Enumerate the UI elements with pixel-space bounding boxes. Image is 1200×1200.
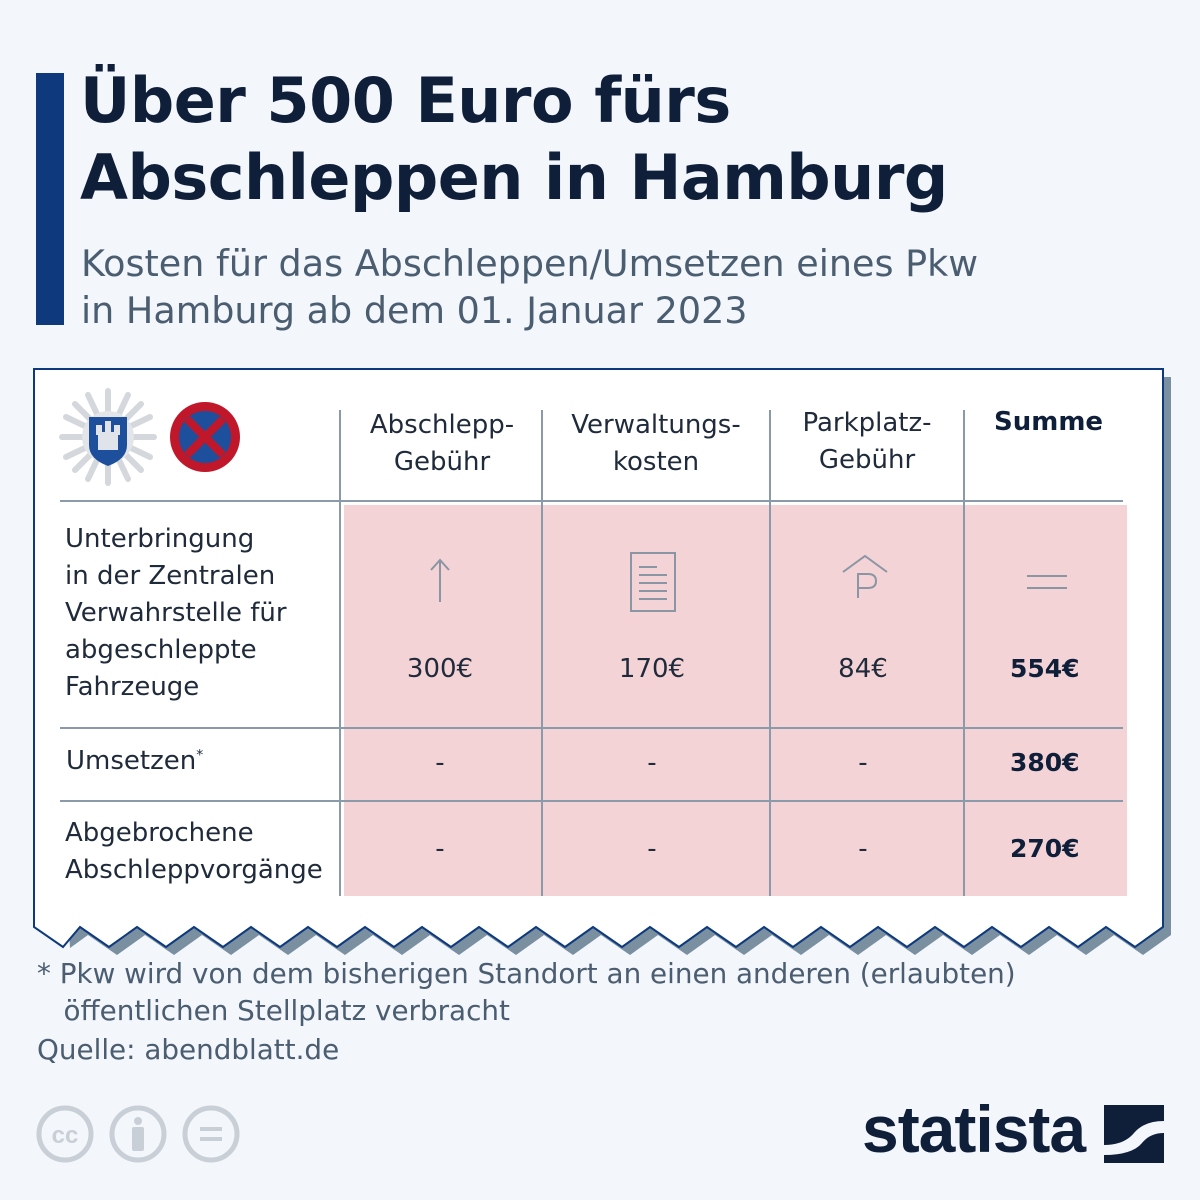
source: Quelle: abendblatt.de bbox=[37, 1033, 339, 1066]
row 1 values: 554€ bbox=[1010, 654, 1080, 683]
license icons bbox=[36, 1106, 240, 1162]
row 3 values: - bbox=[858, 834, 868, 864]
row 1 values: 84€ bbox=[838, 654, 888, 684]
subtitle bbox=[81, 242, 978, 332]
row 3 values: - bbox=[435, 834, 445, 864]
row label 1 bbox=[65, 524, 287, 702]
footnote: öffentlichen Stellplatz verbracht bbox=[64, 994, 510, 1027]
title: Abschleppen in Hamburg bbox=[80, 141, 948, 214]
row label 1: in der Zentralen bbox=[65, 561, 275, 591]
header: Abschlepp-Gebühr: Gebühr bbox=[394, 447, 490, 477]
header: Parkplatz-Gebühr: Parkplatz- bbox=[802, 408, 932, 438]
row label 3 bbox=[65, 818, 323, 885]
icon: parking bbox=[842, 554, 888, 598]
title: Über 500 Euro fürs bbox=[80, 64, 731, 137]
accent bar bbox=[36, 73, 64, 325]
icon: equals bbox=[1027, 575, 1067, 589]
row 2 values: - bbox=[647, 748, 657, 778]
header: Verwaltungskosten bbox=[571, 410, 741, 477]
row 3 values: 270€ bbox=[1010, 834, 1080, 863]
row label 3: Abgebrochene bbox=[65, 818, 254, 848]
row 2 values: 380€ bbox=[1010, 748, 1080, 777]
icon: police star bbox=[59, 388, 157, 486]
header: Verwaltungskosten: Verwaltungs- bbox=[571, 410, 741, 440]
header: Summe: Summe bbox=[994, 407, 1103, 437]
row 1 values bbox=[407, 654, 1080, 684]
header: Abschlepp-Gebühr: Abschlepp- bbox=[370, 410, 514, 440]
icon: document bbox=[630, 552, 676, 612]
header: Parkplatz-Gebühr: Gebühr bbox=[819, 445, 915, 475]
row label 3: Abschleppvorgänge bbox=[65, 855, 323, 885]
header: Parkplatz-Gebühr bbox=[802, 408, 932, 475]
row label 1: abgeschleppte bbox=[65, 635, 257, 665]
header: Abschlepp-Gebühr bbox=[370, 410, 514, 477]
row 1 values: 300€ bbox=[407, 654, 473, 684]
footnote: * Pkw wird von dem bisherigen Standort an einen anderen (erlaubten) bbox=[37, 957, 1016, 990]
license icons: cc bbox=[52, 1122, 78, 1149]
icon: arrow up bbox=[430, 558, 450, 602]
row label 1: Unterbringung bbox=[65, 524, 254, 554]
footnote bbox=[37, 957, 1016, 1027]
title bbox=[80, 64, 948, 214]
row 3 values: - bbox=[647, 834, 657, 864]
statista logo: statista bbox=[862, 1092, 1085, 1166]
row 1 values: 170€ bbox=[619, 654, 685, 684]
row 2 values: - bbox=[858, 748, 868, 778]
row 2 values bbox=[435, 748, 1080, 778]
row 3 values bbox=[435, 834, 1080, 864]
subtitle: Kosten für das Abschleppen/Umsetzen eines Pkw bbox=[81, 242, 978, 285]
row label 1: Verwahrstelle für bbox=[65, 598, 287, 628]
header: Verwaltungskosten: kosten bbox=[613, 447, 699, 477]
row label 1: Fahrzeuge bbox=[65, 672, 199, 702]
row label 2: Umsetzen* bbox=[66, 746, 203, 776]
row 2 values: - bbox=[435, 748, 445, 778]
subtitle: in Hamburg ab dem 01. Januar 2023 bbox=[81, 289, 748, 332]
icon: no stopping sign bbox=[170, 402, 240, 472]
